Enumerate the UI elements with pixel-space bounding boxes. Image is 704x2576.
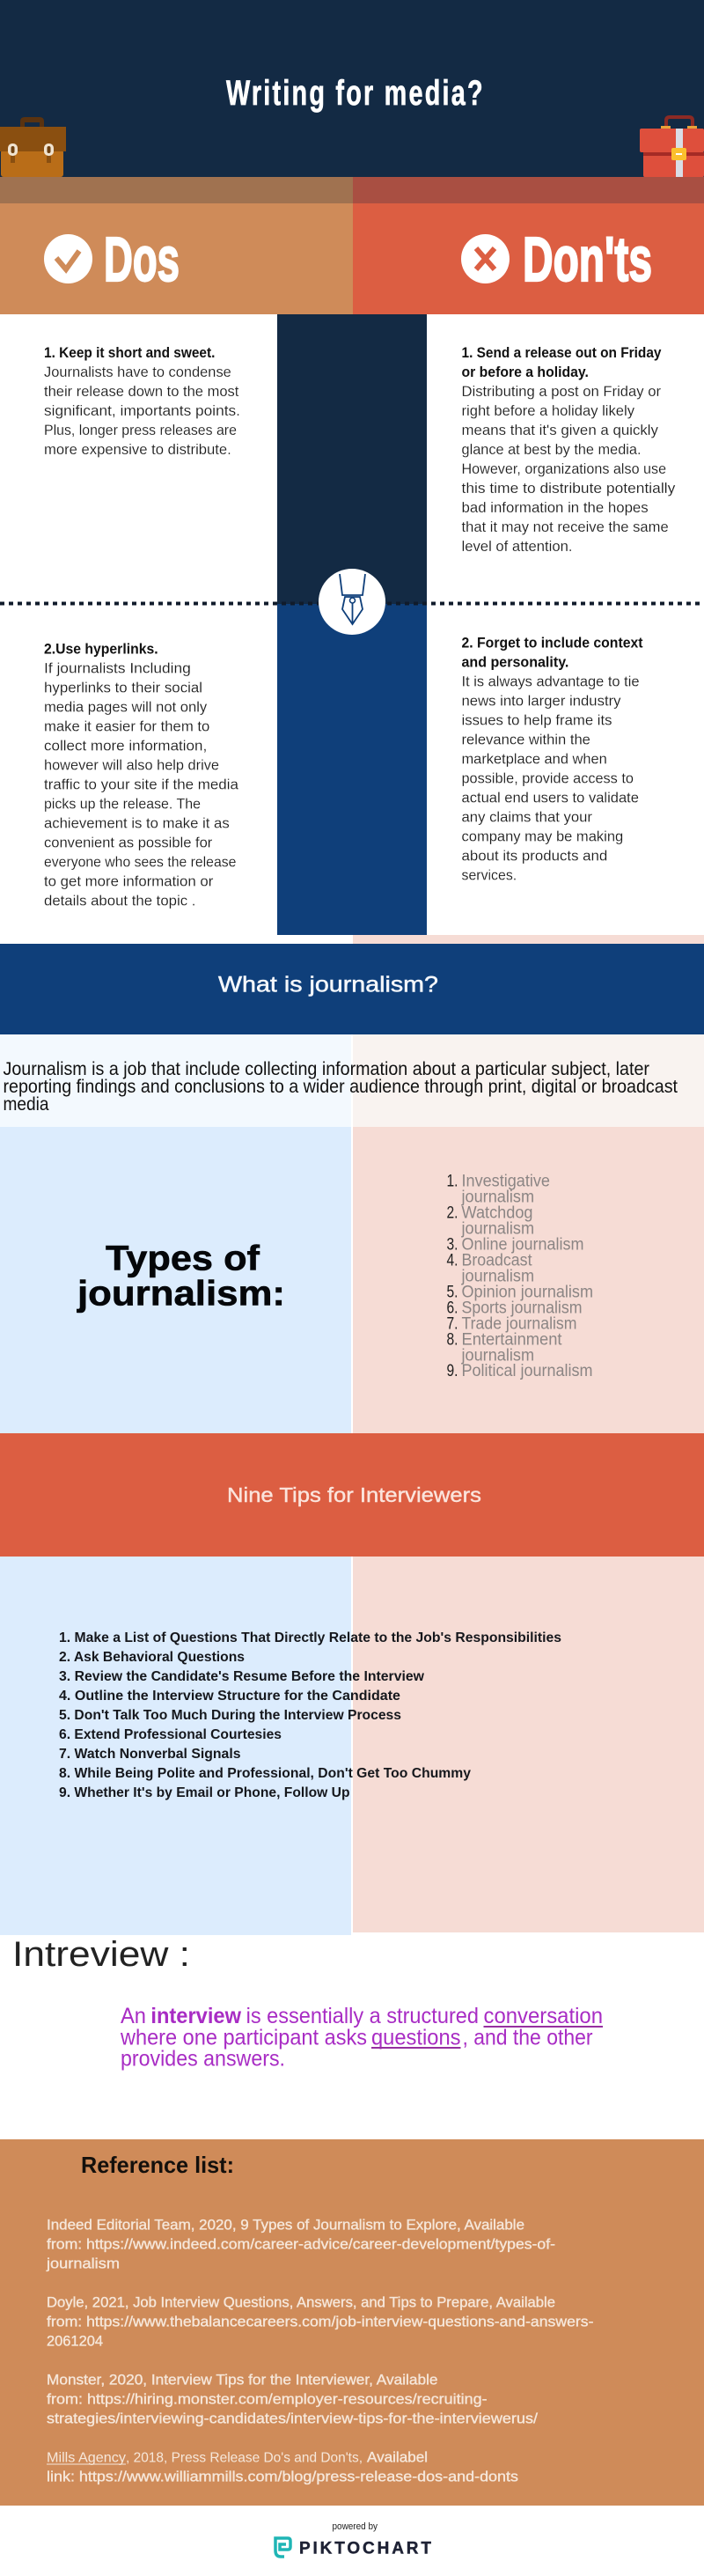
- dos tip 2: however will also help drive: [44, 758, 219, 774]
- dos tip 2: everyone who sees the release: [44, 855, 236, 871]
- don'ts tip 2: actual end users to validate: [461, 791, 639, 806]
- panel: types of journalism list: journalism: [461, 1188, 534, 1206]
- reference 3: from: https://hiring.monster.com/employer-resources/recruiting-: [47, 2392, 488, 2408]
- panel: types of journalism list: Investigative: [461, 1172, 550, 1190]
- don'ts tip 2: and personality.: [461, 655, 568, 671]
- panel: types of journalism list: Entertainment: [461, 1330, 562, 1349]
- panel: types of journalism list: 6.: [447, 1299, 458, 1317]
- reference 1: from: https://www.indeed.com/career-advice/career-development/types-of-: [47, 2237, 555, 2253]
- dos tip 1: Journalists have to condense: [44, 364, 231, 380]
- interview definition: conversation: [484, 2004, 603, 2028]
- icon: check mark: [44, 234, 92, 283]
- reference 1: journalism: [46, 2256, 120, 2272]
- reference 4: Mills Agency: [47, 2451, 126, 2466]
- icon: fountain pen: [319, 569, 385, 635]
- banner: what is journalism: What is journalism?: [218, 973, 438, 997]
- don'ts tip 1: or before a holiday.: [461, 364, 589, 380]
- panel: types of journalism list: journalism: [461, 1346, 534, 1365]
- don'ts tip 1: this time to distribute potentially: [461, 481, 676, 497]
- banner: nine tips: Nine Tips for Interviewers: [227, 1483, 481, 1506]
- dos tip 2: convenient as possible for: [44, 835, 213, 851]
- dos tip 2: to get more information or: [44, 874, 214, 890]
- reference 2: from: https://www.thebalancecareers.com/job-interview-questions-and-answers-: [47, 2315, 593, 2330]
- icon: piktochart logo: [275, 2538, 290, 2557]
- don'ts tip 1: Distributing a post on Friday or: [461, 384, 662, 400]
- tips list: 2. Ask Behavioral Questions: [59, 1650, 245, 1665]
- don'ts tip 2: services.: [461, 868, 517, 884]
- footer: powered by piktochart: [275, 2521, 431, 2558]
- dos tip 2: achievement is to make it as: [44, 816, 230, 832]
- don'ts tip 1: [461, 345, 676, 555]
- reference 4: [47, 2450, 518, 2485]
- panel: types of journalism list: [353, 1127, 704, 1433]
- dos tip 1: Plus, longer press releases are: [44, 423, 237, 438]
- interview definition: provides answers.: [121, 2047, 285, 2072]
- panel: types of journalism heading: [0, 1127, 351, 1433]
- banner: what is journalism: [0, 944, 704, 1034]
- reference 1: Indeed Editorial Team, 2020, 9 Types of Journalism to Explore, Available: [47, 2218, 524, 2234]
- heading: reference list: Reference list:: [81, 2152, 234, 2178]
- dos tip 2: If journalists Including: [44, 661, 191, 677]
- don'ts tip 2: issues to help frame its: [461, 713, 612, 729]
- don'ts tip 2: news into larger industry: [461, 694, 621, 710]
- panel: types of journalism list: journalism: [461, 1219, 534, 1238]
- interview definition: questions: [371, 2026, 461, 2050]
- icon: cross mark: [461, 234, 510, 283]
- dos tip 2: picks up the release. The: [44, 797, 201, 813]
- panel: journalism definition: media: [4, 1094, 49, 1115]
- reference 2: Doyle, 2021, Job Interview Questions, Answers, and Tips to Prepare, Available: [47, 2295, 555, 2311]
- panel: types of journalism list: Political journalism: [461, 1362, 593, 1380]
- reference 1: [46, 2218, 555, 2272]
- don'ts tip 1: However, organizations also use: [461, 461, 666, 477]
- reference 4: link: https://www.williammills.com/blog/press-release-dos-and-donts: [47, 2469, 518, 2485]
- don'ts tip 1: right before a holiday likely: [461, 403, 635, 419]
- panel: tips background: [0, 1557, 704, 1935]
- don'ts tip 2: 2. Forget to include context: [461, 636, 643, 651]
- panel: journalism definition: [0, 1034, 704, 1127]
- don'ts tip 2: marketplace and when: [461, 752, 607, 768]
- tips list: 3. Review the Candidate's Resume Before the Interview: [59, 1669, 425, 1684]
- panel: types of journalism list: Online journalism: [461, 1235, 584, 1254]
- dos tip 1: their release down to the most: [44, 384, 239, 400]
- don'ts tip 2: company may be making: [461, 829, 623, 845]
- dos tip 2: make it easier for them to: [44, 719, 209, 735]
- dos tip 2: collect more information,: [44, 739, 207, 754]
- don'ts tip 2: It is always advantage to tie: [461, 674, 639, 690]
- reference 4: , 2018, Press Release Do's and Don'ts,: [126, 2451, 363, 2466]
- interview definition: , and the other: [463, 2026, 593, 2050]
- interview definition: interview: [150, 2004, 242, 2028]
- don'ts tip 2: about its products and: [461, 849, 607, 865]
- heading: interview: Intreview :: [12, 1935, 190, 1974]
- centre column: [277, 314, 427, 935]
- panel: types of journalism list: Opinion journalism: [461, 1283, 593, 1301]
- panel: types of journalism heading: journalism:: [77, 1275, 285, 1314]
- dos tip 2: hyperlinks to their social: [44, 681, 202, 696]
- panel: types of journalism list: Broadcast: [461, 1251, 532, 1270]
- tips list: 4. Outline the Interview Structure for the Candidate: [59, 1689, 400, 1704]
- panel: don'ts heading: [353, 203, 704, 314]
- dos tip 1: 1. Keep it short and sweet.: [44, 345, 215, 361]
- tips list: [59, 1630, 561, 1800]
- don'ts tip 1: 1. Send a release out on Friday: [461, 345, 662, 361]
- panel: types of journalism list: 7.: [447, 1314, 458, 1333]
- reference 2: 2061204: [47, 2334, 103, 2350]
- tips list: 1. Make a List of Questions That Directly Relate to the Job's Responsibilities: [59, 1630, 561, 1645]
- interview definition: An: [121, 2004, 146, 2028]
- tips list: 7. Watch Nonverbal Signals: [59, 1747, 241, 1762]
- reference 4: Availabel: [367, 2450, 428, 2466]
- panel: journalism definition: Journalism is a job that include collecting information about a particular subject, later: [4, 1059, 649, 1079]
- don'ts tip 2: possible, provide access to: [461, 771, 634, 787]
- title: Writing for media?: [226, 73, 483, 113]
- panel: types of journalism list: 8.: [447, 1330, 458, 1349]
- reference 3: [47, 2373, 538, 2427]
- panel: types of journalism list: 9.: [447, 1362, 458, 1380]
- panel: types of journalism list: 1.: [447, 1172, 458, 1190]
- header panel: [0, 0, 704, 177]
- interview definition: is essentially a structured: [246, 2004, 479, 2028]
- heading: Don'ts: Don'ts: [523, 225, 652, 295]
- reference 3: Monster, 2020, Interview Tips for the Interviewer, Available: [47, 2373, 438, 2388]
- don'ts tip 2: [461, 636, 643, 884]
- panel: types of journalism list: 4.: [447, 1251, 458, 1270]
- tips list: 6. Extend Professional Courtesies: [59, 1727, 282, 1742]
- dos tip 2: details about the topic .: [44, 894, 195, 909]
- panel: types of journalism list: Sports journalism: [461, 1299, 583, 1317]
- heading: Dos: Dos: [104, 225, 180, 295]
- panel: types of journalism list: Watchdog: [461, 1203, 533, 1222]
- panel: types of journalism list: 2.: [447, 1203, 458, 1222]
- dos tip 1: [44, 345, 240, 458]
- dos tip 1: significant, importants points.: [44, 403, 240, 419]
- panel: types of journalism list: 3.: [447, 1235, 458, 1254]
- reference 3: strategies/interviewing-candidates/interview-tips-for-the-interviewerus/: [47, 2411, 538, 2427]
- wordmark: PIKTOCHART: [299, 2539, 431, 2558]
- panel: types of journalism list: 5.: [447, 1283, 458, 1301]
- dos tip 2: traffic to your site if the media: [44, 777, 239, 793]
- reference 2: [47, 2295, 593, 2350]
- don'ts tip 1: means that it's given a quickly: [461, 423, 659, 438]
- tips list: 8. While Being Polite and Professional, Don't Get Too Chummy: [59, 1766, 471, 1781]
- dos tip 2: [44, 642, 239, 909]
- panel: types of journalism list: journalism: [461, 1267, 534, 1285]
- panel: reference list: [0, 2139, 704, 2506]
- shaded band: [0, 177, 704, 203]
- don'ts tip 2: relevance within the: [461, 732, 590, 748]
- banner: nine tips: [0, 1433, 704, 1557]
- icon: red toolbox: [640, 115, 704, 178]
- panel: types of journalism list: Trade journalism: [461, 1314, 577, 1333]
- dos tip 1: more expensive to distribute.: [44, 442, 231, 458]
- dos tip 2: media pages will not only: [44, 700, 208, 716]
- don'ts tip 1: bad information in the hopes: [461, 500, 649, 516]
- interview definition: [120, 2004, 603, 2072]
- panel: journalism definition: reporting findings and conclusions to a wider audience through print, digital or broadcast: [4, 1077, 678, 1097]
- icon: brown briefcase: [0, 117, 66, 177]
- dos tip 2: 2.Use hyperlinks.: [44, 642, 158, 658]
- tips list: 9. Whether It's by Email or Phone, Follow Up: [59, 1785, 350, 1800]
- don'ts tip 1: that it may not receive the same: [461, 519, 669, 535]
- footer: powered by piktochart: powered by: [333, 2521, 378, 2532]
- panel: dos heading: [0, 203, 353, 314]
- don'ts tip 1: level of attention.: [461, 539, 572, 555]
- don'ts tip 1: glance at best by the media.: [461, 442, 641, 458]
- don'ts tip 2: any claims that your: [461, 810, 593, 826]
- interview definition: where one participant asks: [120, 2026, 367, 2050]
- panel: types of journalism heading: Types of: [106, 1240, 260, 1278]
- tips list: 5. Don't Talk Too Much During the Interview Process: [59, 1708, 401, 1723]
